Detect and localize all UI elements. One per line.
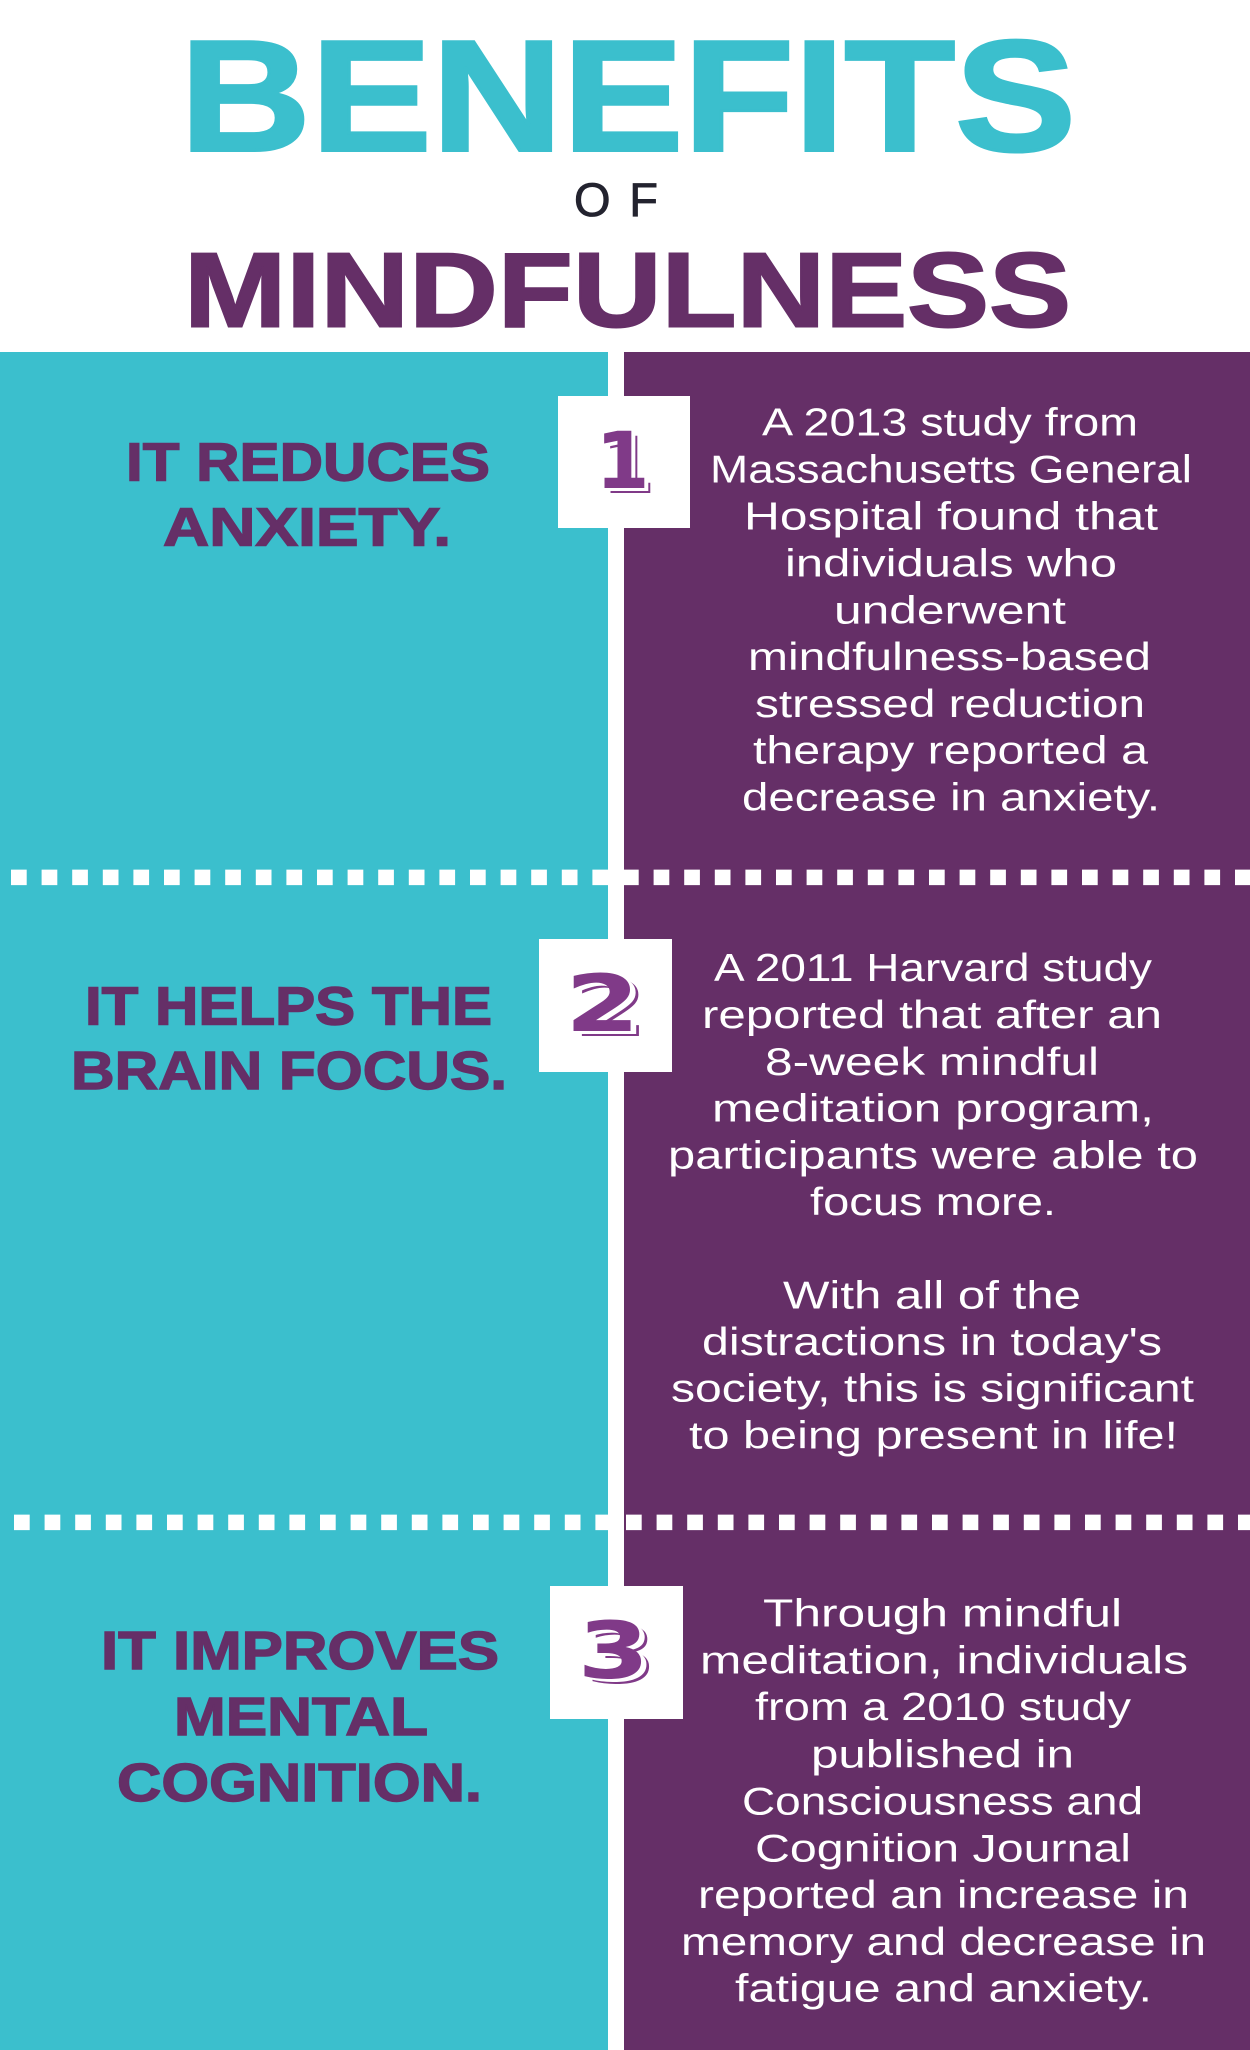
title: OF: OF bbox=[574, 173, 658, 226]
title: BENEFITS: BENEFITS bbox=[180, 8, 1076, 184]
heading: it improves mental cognition: MENTAL bbox=[174, 1687, 428, 1747]
heading: it helps the brain focus: IT HELPS THE bbox=[85, 976, 492, 1036]
text block: study on focus: focus more. bbox=[810, 1181, 1056, 1224]
text block: study on cognition: from a 2010 study bbox=[755, 1686, 1132, 1729]
text block: study on anxiety: A 2013 study from bbox=[762, 402, 1138, 445]
text block: study on focus: distractions in today's bbox=[702, 1321, 1162, 1364]
heading: it helps the brain focus: BRAIN FOCUS. bbox=[71, 1041, 507, 1101]
heading: it reduces anxiety: ANXIETY. bbox=[163, 498, 451, 558]
text block: study on cognition: Through mindful bbox=[763, 1593, 1122, 1636]
heading: it reduces anxiety bbox=[126, 432, 490, 558]
text block: study on anxiety: mindfulness-based bbox=[748, 636, 1151, 679]
text block: study on cognition: published in bbox=[811, 1733, 1074, 1776]
heading: it reduces anxiety: IT REDUCES bbox=[126, 432, 490, 492]
heading: it improves mental cognition bbox=[101, 1621, 499, 1813]
text block: study on focus: With all of the bbox=[783, 1274, 1081, 1317]
text block: study on cognition bbox=[681, 1593, 1206, 2011]
heading: it helps the brain focus bbox=[71, 976, 507, 1101]
text block: study on focus: reported that after an bbox=[702, 994, 1162, 1037]
text block: study on focus: A 2011 Harvard study bbox=[714, 947, 1153, 990]
text block: study on anxiety: Hospital found that bbox=[744, 495, 1158, 538]
text block: study on focus: meditation program, bbox=[712, 1088, 1154, 1130]
text block: study on focus: to being present in life! bbox=[689, 1414, 1178, 1458]
text block: study on focus: 8-week mindful bbox=[765, 1041, 1099, 1084]
text block: study on cognition: fatigue and anxiety. bbox=[735, 1968, 1152, 2011]
number badge 1 bbox=[558, 396, 690, 528]
text block: study on anxiety bbox=[710, 402, 1192, 820]
heading: it improves mental cognition: IT IMPROVES bbox=[101, 1621, 499, 1681]
text block: study on focus: society, this is significant bbox=[671, 1368, 1194, 1410]
text block: study on anxiety: decrease in anxiety. bbox=[742, 776, 1160, 820]
text block: study on anxiety: therapy reported a bbox=[753, 730, 1148, 772]
number 3: 3 bbox=[578, 1607, 649, 1697]
text block: study on cognition: meditation, individuals bbox=[700, 1639, 1188, 1682]
text block: study on anxiety: Massachusetts General bbox=[710, 449, 1192, 492]
text block: study on cognition: memory and decrease in bbox=[681, 1921, 1206, 1964]
text block: study on cognition: Cognition Journal bbox=[755, 1828, 1131, 1870]
heading: it improves mental cognition: COGNITION. bbox=[117, 1753, 482, 1813]
text block: study on cognition: reported an increase in bbox=[698, 1874, 1189, 1917]
panel: left teal column bbox=[0, 352, 608, 2050]
number badge 3 bbox=[550, 1586, 683, 1719]
number badge 2 bbox=[539, 939, 672, 1072]
text block: study on anxiety: underwent bbox=[834, 589, 1066, 632]
text block: study on cognition: Consciousness and bbox=[742, 1780, 1143, 1823]
text block: study on anxiety: individuals who bbox=[785, 542, 1117, 586]
number 1: 1 bbox=[595, 417, 650, 507]
title: MINDFULNESS: MINDFULNESS bbox=[184, 232, 1071, 350]
number 2: 2 bbox=[565, 960, 640, 1050]
text block: study on focus bbox=[668, 947, 1198, 1458]
text block: study on focus: participants were able to bbox=[668, 1134, 1198, 1177]
panel: right purple column bbox=[624, 352, 1250, 2050]
text block: study on anxiety: stressed reduction bbox=[755, 683, 1145, 726]
